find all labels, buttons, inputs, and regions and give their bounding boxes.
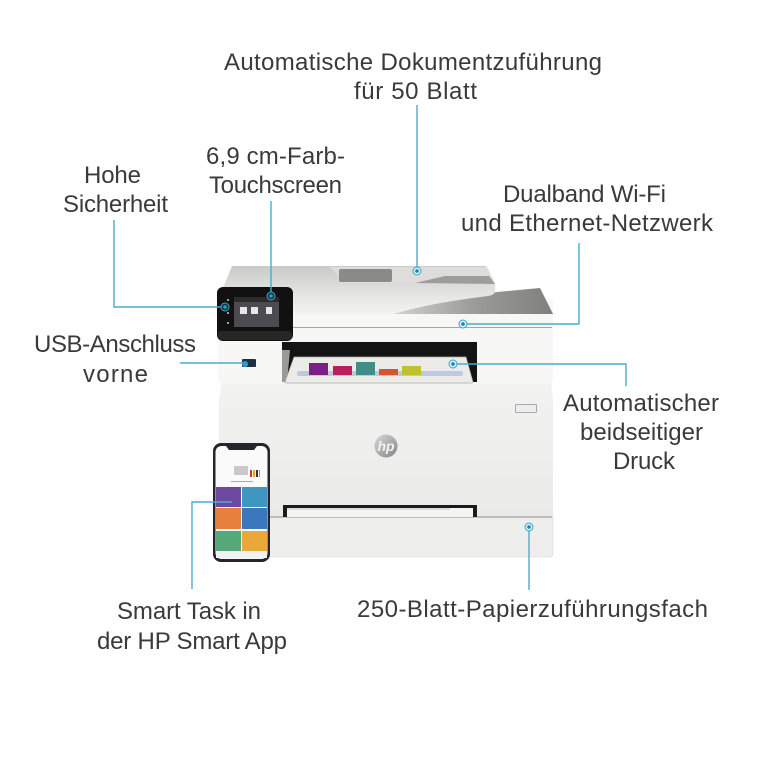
heading: duplex: Automatischer bbox=[563, 390, 719, 417]
output tray cavity bbox=[282, 342, 477, 382]
marker: duplex bbox=[449, 360, 457, 368]
manual feed slot bbox=[283, 505, 477, 517]
marker: security bbox=[221, 303, 229, 311]
document feeder tray bbox=[330, 267, 495, 284]
heading: network: Dualband Wi-Fi bbox=[503, 181, 666, 208]
printed paper with colour blocks bbox=[285, 357, 473, 383]
marker: USB bbox=[242, 361, 248, 367]
heading: security bbox=[63, 162, 168, 218]
app printer thumbnail bbox=[231, 466, 260, 482]
scanner top lid bbox=[218, 266, 495, 314]
heading: security: Sicherheit bbox=[63, 191, 168, 218]
heading: network: und Ethernet-Netzwerk bbox=[461, 210, 714, 237]
control panel bbox=[217, 287, 293, 341]
marker: network bbox=[459, 320, 467, 328]
heading: smart app bbox=[97, 598, 287, 655]
heading: smart app: Smart Task in bbox=[117, 598, 261, 625]
smartphone with HP Smart app bbox=[213, 443, 270, 562]
heading: duplex: Druck bbox=[613, 448, 676, 475]
heading: USB: vorne bbox=[83, 361, 148, 388]
phone notch bbox=[226, 446, 257, 450]
heading: document feeder: Automatische Dokumentzuführung bbox=[224, 49, 602, 76]
app tiles bbox=[216, 487, 267, 551]
marker: touchscreen bbox=[267, 292, 275, 300]
heading: network bbox=[461, 181, 714, 237]
heading: touchscreen: 6,9 cm-Farb- bbox=[206, 143, 345, 170]
paper tray front bbox=[219, 517, 553, 557]
scanner glass line bbox=[292, 326, 552, 328]
heading: document feeder: für 50 Blatt bbox=[354, 78, 477, 105]
heading: touchscreen: Touchscreen bbox=[209, 172, 342, 199]
heading: paper tray: 250-Blatt-Papierzuführungsfach bbox=[357, 596, 708, 623]
heading: document feeder bbox=[224, 49, 602, 105]
tray divider bbox=[262, 516, 552, 518]
USB port bbox=[242, 359, 256, 367]
front section bbox=[218, 340, 553, 384]
heading: duplex: beidseitiger bbox=[580, 419, 703, 446]
heading: duplex bbox=[563, 390, 719, 475]
cavity side wall bbox=[282, 350, 290, 382]
HP logo: hp bbox=[377, 438, 395, 454]
heading: USB bbox=[34, 331, 196, 388]
callout lines bbox=[114, 105, 626, 590]
marker: paper tray bbox=[525, 523, 533, 531]
marker: document feeder bbox=[413, 267, 421, 275]
heading: USB: USB-Anschluss bbox=[34, 331, 196, 358]
heading: touchscreen bbox=[206, 143, 345, 199]
app tab bar bbox=[216, 551, 267, 558]
heading: smart app: der HP Smart App bbox=[97, 628, 287, 655]
output document tray bbox=[393, 288, 553, 314]
printer lower body bbox=[219, 380, 553, 557]
heading: security: Hohe bbox=[84, 162, 141, 189]
status window bbox=[516, 404, 536, 412]
HP logo bbox=[374, 434, 398, 458]
printer bbox=[217, 266, 553, 557]
scanner band bbox=[218, 300, 553, 342]
